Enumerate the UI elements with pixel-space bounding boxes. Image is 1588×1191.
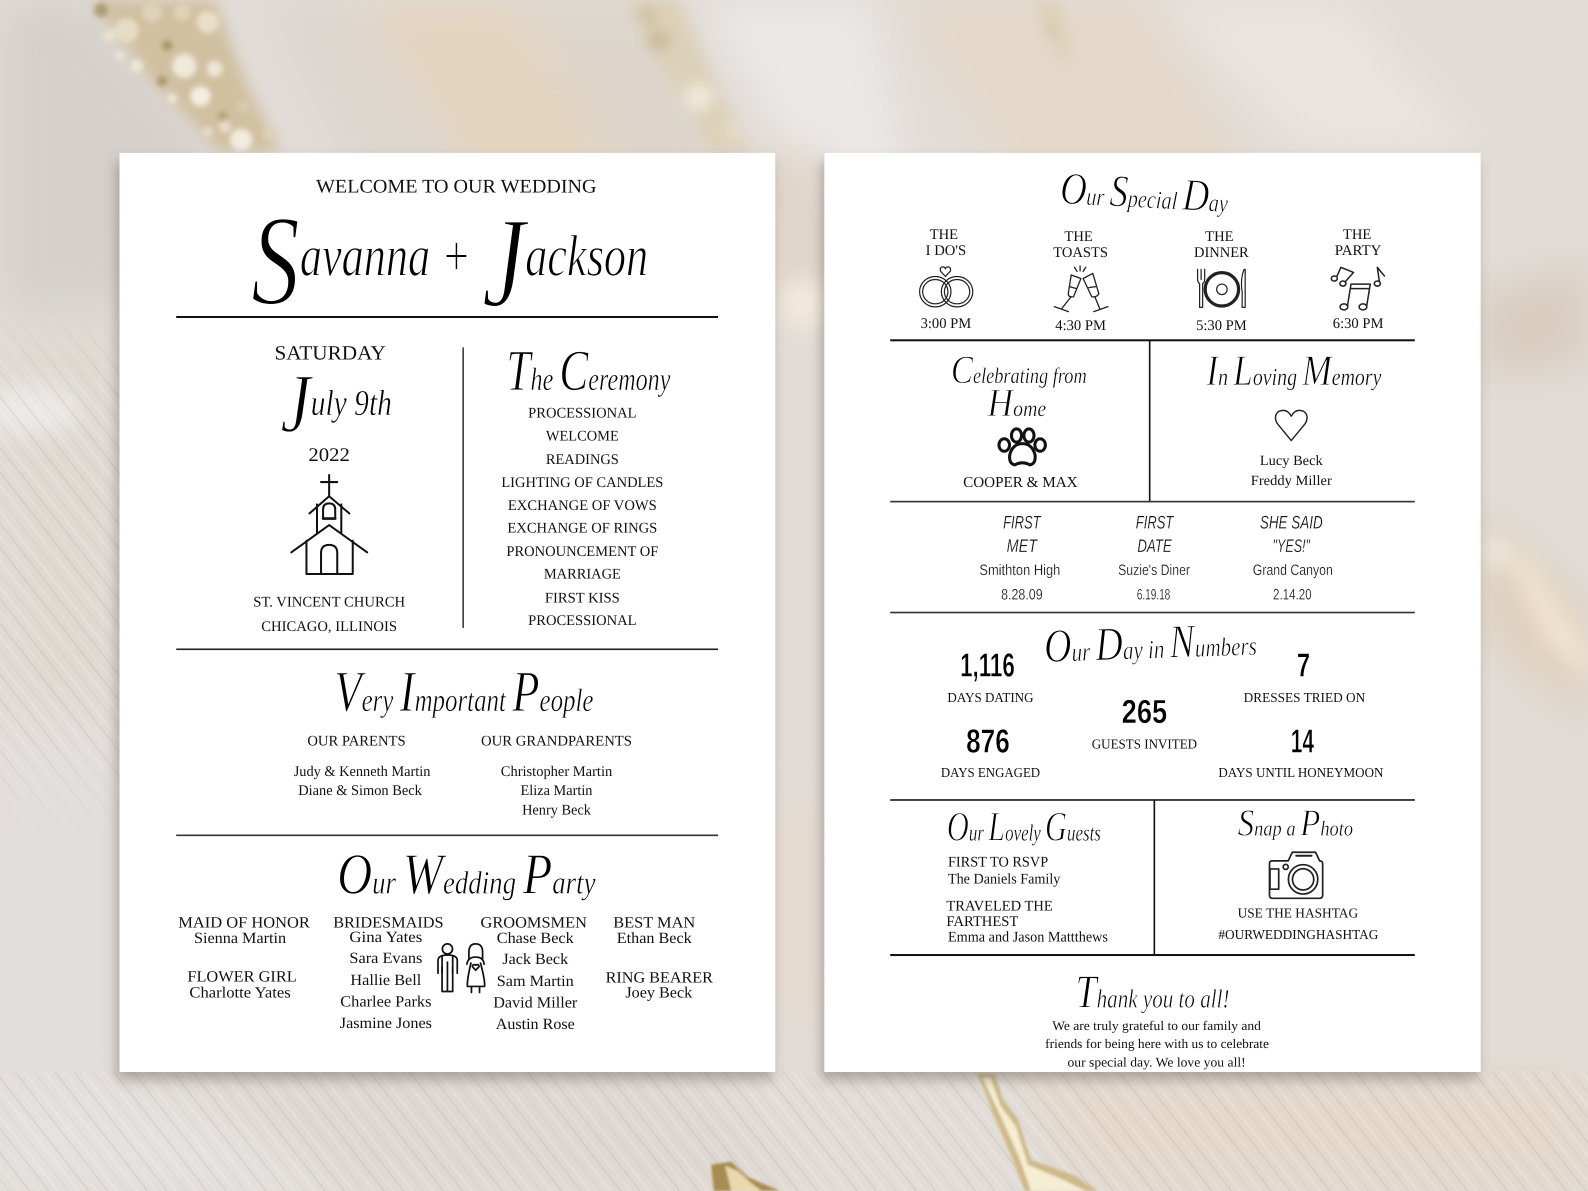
date block — [274, 342, 392, 466]
icon: bride and groom — [438, 944, 485, 992]
divider above VIPs — [176, 648, 718, 650]
milestone: first date: Suzie's Diner — [1118, 562, 1190, 579]
milestone: she said yes: 2.14.20 — [1273, 586, 1312, 604]
timeline: toasts: THE — [1064, 229, 1093, 245]
grandparents list: OUR GRANDPARENTS — [481, 733, 632, 749]
grandparents list: Eliza Martin — [521, 783, 593, 799]
divider — [890, 501, 1415, 502]
parents list: Diane & Simon Beck — [298, 783, 423, 799]
groomsmen list — [481, 915, 587, 1033]
milestone: first met: Smithton High — [979, 562, 1060, 579]
milestone: she said yes: SHE SAID — [1260, 512, 1323, 533]
section: snap a photo — [1218, 802, 1379, 942]
bridesmaids list: Sara Evans — [349, 950, 422, 967]
maid of honor and flower girl: MAID OF HONOR — [178, 915, 311, 932]
heading: very important people: Very Important People — [334, 660, 593, 724]
section: celebrating from home: Celebrating from — [951, 347, 1087, 392]
ceremony order list: READINGS — [546, 452, 619, 468]
timeline: party: PARTY — [1335, 243, 1382, 259]
stat: guests invited — [1092, 693, 1197, 751]
ceremony order list: PRONOUNCEMENT OF — [506, 544, 658, 560]
timeline: i do's: THE — [930, 227, 958, 243]
icon: heart — [1275, 410, 1307, 441]
timeline: dinner — [1194, 229, 1249, 334]
section: celebrating from home — [951, 347, 1087, 491]
stat: days engaged: DAYS ENGAGED — [941, 765, 1040, 780]
ceremony order list: PROCESSIONAL — [528, 613, 637, 629]
welcome line: WELCOME TO OUR WEDDING — [316, 176, 597, 197]
section: our lovely guests: FIRST TO RSVP — [948, 854, 1048, 870]
ceremony order list: PROCESSIONAL — [528, 405, 637, 421]
heading: the ceremony: The Ceremony — [506, 339, 671, 403]
ceremony order list: EXCHANGE OF VOWS — [508, 498, 657, 514]
section: snap a photo: #OURWEDDINGHASHTAG — [1218, 927, 1379, 942]
couple names: ackson — [525, 223, 648, 289]
stat: days until honeymoon: DAYS UNTIL HONEYMOON — [1218, 765, 1384, 780]
milestone: first date — [1118, 512, 1190, 604]
stat: guests invited: GUESTS INVITED — [1092, 736, 1197, 751]
couple names: S — [251, 188, 300, 332]
ceremony order list: LIGHTING OF CANDLES — [501, 475, 663, 491]
best man and ring bearer: RING BEARER — [606, 969, 714, 986]
gold leaf — [91, 0, 1098, 1191]
groomsmen list: Austin Rose — [496, 1016, 575, 1033]
stat: dresses tried on: 7 — [1297, 646, 1310, 684]
heading: our special day: Our Special Day — [1059, 163, 1230, 222]
maid of honor and flower girl: FLOWER GIRL — [187, 968, 297, 985]
milestone: first met: MET — [1007, 536, 1039, 556]
section: celebrating from home: Home — [987, 381, 1046, 425]
maid of honor and flower girl — [178, 915, 311, 1002]
timeline: dinner: THE — [1205, 229, 1234, 245]
stat: days until honeymoon — [1218, 722, 1384, 780]
groomsmen list: Jack Beck — [502, 951, 568, 968]
grandparents list — [481, 733, 632, 818]
heading: our wedding party: Our Wedding Party — [337, 843, 596, 906]
column divider — [1149, 340, 1150, 501]
ceremony order list: WELCOME — [546, 428, 619, 445]
icon: champagne flutes — [1054, 266, 1108, 312]
icon: paw print — [999, 429, 1045, 465]
date block: SATURDAY — [274, 342, 386, 365]
timeline: dinner: 5:30 PM — [1196, 318, 1247, 334]
thank you message: our special day. We love you all! — [1067, 1054, 1246, 1069]
best man and ring bearer: BEST MAN — [613, 915, 695, 932]
section: our lovely guests — [946, 803, 1108, 945]
date block: 2022 — [308, 445, 350, 466]
bridesmaids list — [333, 915, 444, 1032]
milestone: first date: FIRST — [1136, 512, 1175, 533]
section: our lovely guests: The Daniels Family — [948, 871, 1061, 888]
section: our lovely guests: Emma and Jason Mattthews — [948, 929, 1108, 945]
timeline: i do's: I DO'S — [926, 243, 966, 259]
stat: days engaged: 876 — [966, 722, 1010, 760]
section: in loving memory: Freddy Miller — [1251, 474, 1332, 489]
divider under timeline — [890, 339, 1415, 341]
milestone: she said yes — [1253, 512, 1333, 604]
parents list — [294, 733, 431, 799]
venue: ST. VINCENT CHURCH — [253, 594, 406, 611]
section: in loving memory: In Loving Memory — [1205, 347, 1382, 395]
stat: days dating: DAYS DATING — [947, 690, 1034, 705]
icon: church — [291, 475, 367, 574]
icon: rings — [920, 267, 973, 307]
brush texture — [0, 294, 1588, 1191]
stat: dresses tried on: DRESSES TRIED ON — [1244, 690, 1365, 705]
bridesmaids list: Jasmine Jones — [340, 1015, 432, 1032]
couple names: J — [482, 190, 529, 334]
milestone: first met — [979, 512, 1060, 604]
thank you message: We are truly grateful to our family and — [1052, 1018, 1261, 1033]
ceremony order list — [501, 405, 663, 629]
milestone: first date: DATE — [1137, 536, 1172, 556]
ceremony order list: EXCHANGE OF RINGS — [507, 521, 657, 537]
milestone: first date: 6.19.18 — [1137, 586, 1170, 604]
bridesmaids list: Hallie Bell — [350, 972, 421, 989]
stat: days until honeymoon: 14 — [1291, 722, 1314, 760]
date block: uly 9th — [311, 383, 392, 423]
timeline: party: 6:30 PM — [1333, 316, 1383, 332]
timeline: party — [1331, 227, 1384, 332]
timeline: dinner: DINNER — [1194, 245, 1249, 261]
couple names: avanna + — [300, 223, 482, 289]
timeline: toasts: 4:30 PM — [1055, 318, 1106, 334]
ceremony order list: MARRIAGE — [544, 566, 621, 582]
icon: music notes — [1331, 267, 1384, 310]
groomsmen list: GROOMSMEN — [481, 915, 587, 932]
bridesmaids list: Gina Yates — [349, 929, 422, 946]
section: celebrating from home: COOPER & MAX — [963, 475, 1078, 491]
venue — [253, 594, 406, 635]
divider above wedding party — [176, 835, 718, 836]
thank you message — [1045, 1018, 1269, 1069]
best man and ring bearer: Joey Beck — [625, 984, 692, 1002]
groomsmen list: David Miller — [493, 995, 578, 1012]
section: our lovely guests: Our Lovely Guests — [947, 803, 1101, 850]
divider — [890, 799, 1415, 801]
divider — [890, 954, 1415, 956]
panel: wedding program back — [824, 153, 1481, 1072]
section: our lovely guests: FARTHEST — [946, 914, 1018, 930]
parents list: Judy & Kenneth Martin — [294, 764, 431, 780]
section: our lovely guests: TRAVELED THE — [946, 898, 1053, 915]
venue: CHICAGO, ILLINOIS — [261, 619, 397, 635]
section: in loving memory: Lucy Beck — [1260, 454, 1323, 469]
groomsmen list: Chase Beck — [497, 930, 574, 947]
stat: days engaged — [941, 722, 1040, 780]
bridesmaids list: Charlee Parks — [340, 994, 431, 1011]
grandparents list: Henry Beck — [522, 802, 592, 818]
divider under names — [176, 316, 718, 318]
parents list: OUR PARENTS — [307, 733, 406, 749]
maid of honor and flower girl: Sienna Martin — [194, 930, 286, 947]
stat: guests invited: 265 — [1122, 693, 1167, 730]
milestone: she said yes: Grand Canyon — [1253, 562, 1333, 579]
timeline: toasts: TOASTS — [1053, 245, 1108, 261]
icon: plate with cutlery — [1198, 269, 1245, 307]
bridesmaids list: BRIDESMAIDS — [333, 915, 444, 932]
icon: camera — [1269, 852, 1323, 898]
stat: dresses tried on — [1244, 646, 1365, 705]
maid of honor and flower girl: Charlotte Yates — [189, 984, 291, 1002]
timeline: i do's — [920, 227, 973, 332]
timeline: party: THE — [1343, 227, 1371, 243]
milestone: first met: 8.28.09 — [1001, 586, 1043, 604]
grandparents list: Christopher Martin — [501, 764, 613, 780]
ceremony order list: FIRST KISS — [545, 590, 620, 607]
heading: our day in numbers: Our Day in Numbers — [1043, 613, 1258, 673]
divider — [890, 612, 1415, 613]
timeline: i do's: 3:00 PM — [921, 316, 971, 332]
stat: days dating: 1,116 — [960, 646, 1015, 684]
thank you message: friends for being here with us to celebrate — [1045, 1036, 1269, 1051]
milestone: first met: FIRST — [1003, 512, 1042, 533]
date block: J — [281, 356, 313, 450]
panel: wedding program front — [120, 153, 775, 1072]
best man and ring bearer: Ethan Beck — [617, 930, 692, 947]
section: snap a photo: Snap a Photo — [1238, 802, 1353, 845]
best man and ring bearer — [606, 915, 714, 1002]
section: in loving memory — [1205, 347, 1382, 489]
heading: thank you: Thank you to all! — [1076, 966, 1229, 1019]
column divider — [462, 347, 464, 628]
column divider — [1154, 800, 1155, 955]
section: snap a photo: USE THE HASHTAG — [1238, 905, 1358, 921]
milestone: she said yes: "YES!" — [1273, 536, 1311, 556]
stat: days dating — [947, 646, 1034, 705]
timeline: toasts — [1053, 229, 1108, 334]
groomsmen list: Sam Martin — [497, 973, 574, 990]
